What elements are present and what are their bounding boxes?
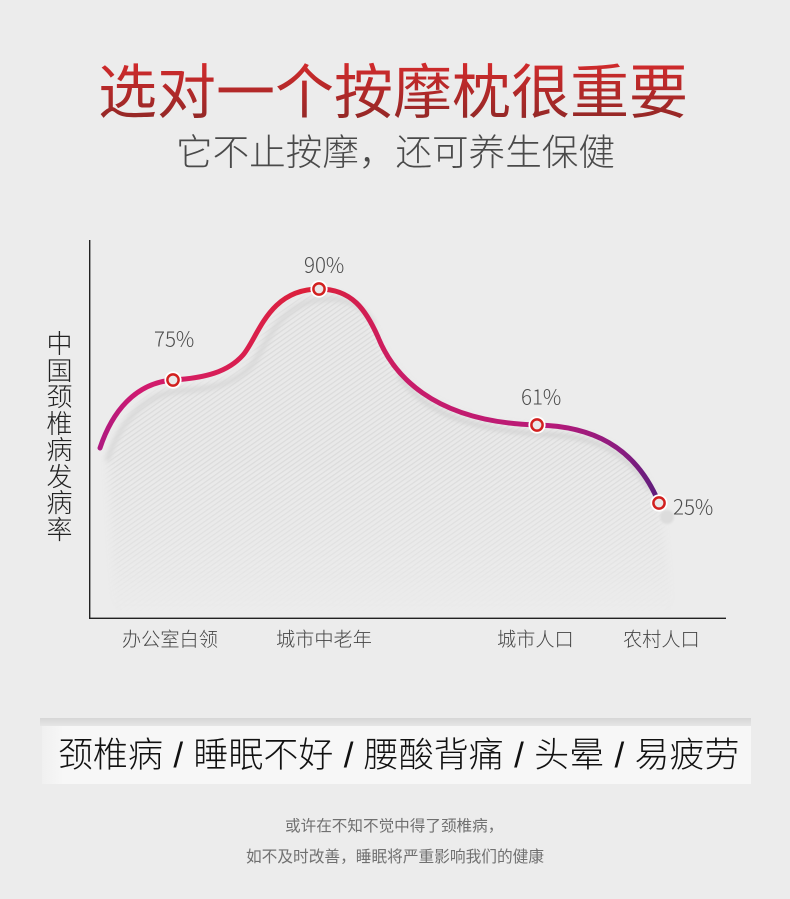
x axis [89,618,726,619]
curve shadow [107,299,374,461]
symptoms banner [40,718,751,784]
title: 选对一个按摩枕很重要 [98,60,688,126]
y axis title: 病 [46,435,72,465]
y axis title: 中 [46,329,72,359]
y axis title: 椎 [46,408,72,438]
y axis title: 国 [46,356,72,386]
marker: 90% [310,280,328,298]
banner shadow strip [40,718,751,726]
y axis title: 颈 [46,382,72,412]
x label: urban elderly: 城市中老年 [276,629,372,651]
banner panel [42,726,751,784]
x label: rural population: 农村人口 [623,629,700,651]
chart [89,240,726,651]
marker: 75% [164,371,182,389]
subtitle: 它不止按摩，还可养生保健 [176,132,615,173]
banner text: 颈椎病 / 睡眠不好 / 腰酸背痛 / 头晕 / 易疲劳 [58,736,740,775]
marker shadow [660,510,674,524]
y axis title [46,329,72,544]
trend curve [100,289,659,503]
x label: urban population: 城市人口 [497,629,574,651]
y axis title: 病 [46,488,72,518]
y axis title: 率 [46,514,72,544]
marker: 61% [528,416,546,434]
footer line 1: 或许在不知不觉中得了颈椎病， [285,818,503,835]
marker: 25% [650,494,668,512]
value: 25%: 25% [673,490,713,520]
x label: office workers: 办公室白领 [122,629,218,651]
value: 90%: 90% [304,248,344,278]
y axis [89,240,90,619]
y axis title: 发 [46,462,72,492]
value: 75%: 75% [154,322,194,352]
value: 61%: 61% [521,380,561,410]
footer line 2: 如不及时改善，睡眠将严重影响我们的健康 [246,849,544,866]
hatched area under curve [108,294,662,568]
